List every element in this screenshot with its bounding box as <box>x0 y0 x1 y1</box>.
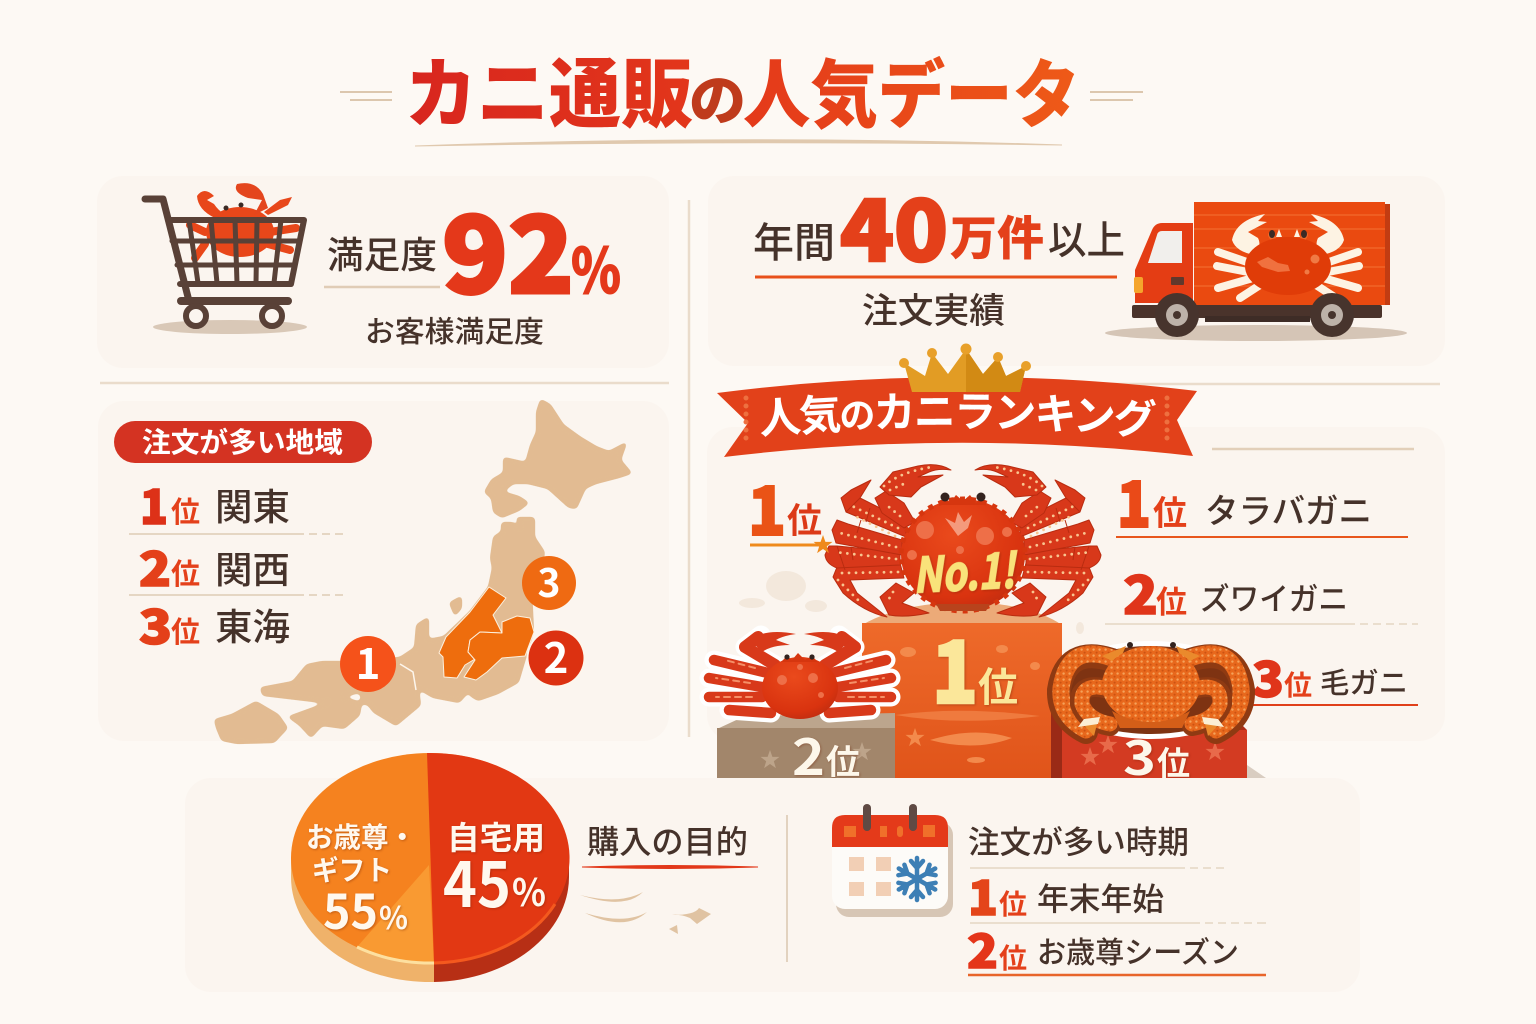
pie label 55% <box>306 816 416 943</box>
pie label 55%: ギフト <box>312 849 392 889</box>
region ranking list: 位 <box>171 551 200 593</box>
text: 400,000+ orders: 万件 <box>950 200 1044 269</box>
marker 2 <box>526 625 586 688</box>
panel: bottom band <box>185 753 1360 992</box>
Sado island <box>450 597 461 615</box>
region ranking list: 関東 <box>215 477 290 531</box>
region ranking list: 位 <box>171 489 200 531</box>
title: 人気データ <box>743 36 1080 143</box>
heading: purchase purpose: 購入の目的 <box>587 817 748 863</box>
text: 400,000+ orders <box>753 165 1125 334</box>
map of Japan <box>215 400 631 743</box>
text: peak order periods: 年末年始 <box>1037 874 1164 920</box>
marker 2: 2 <box>544 625 568 686</box>
pie label 45% <box>443 813 546 925</box>
pie label 55%: % <box>379 893 408 938</box>
illustration: snow crab 2nd <box>709 632 891 719</box>
right ranking list: 毛ガニ <box>1320 660 1408 702</box>
text: peak order periods: 位 <box>999 883 1027 923</box>
text: satisfaction 92%: % <box>571 221 621 311</box>
decorative blobs <box>739 571 1084 634</box>
title: の <box>689 56 746 136</box>
marker 3: 3 <box>537 553 561 609</box>
text: peak order periods <box>967 817 1266 982</box>
pill heading: 注文が多い地域 <box>142 421 343 461</box>
podium 1st place: 位 <box>978 655 1018 713</box>
right ranking list <box>1105 449 1418 711</box>
podium <box>717 602 1266 790</box>
Awaji island <box>361 696 373 704</box>
icon: crown <box>899 344 1031 392</box>
right ranking list: 位 <box>1284 664 1312 704</box>
pie chart: purchase purpose <box>291 753 570 982</box>
text: satisfaction 92%: 92 <box>442 172 574 323</box>
text: peak order periods: 1 <box>968 860 998 929</box>
panel: regions with most orders <box>98 400 669 743</box>
crab on truck <box>1217 214 1359 298</box>
marker 3 <box>522 553 576 610</box>
text: satisfaction 92%: お客様満足度 <box>365 309 544 351</box>
region ranking list: 2 <box>139 531 171 600</box>
Honshu <box>261 518 544 725</box>
text: satisfaction 92%: 満足度 <box>327 225 437 279</box>
podium 2nd place <box>717 713 895 790</box>
Shikoku <box>289 697 361 737</box>
icon: shopping cart with crab <box>145 183 307 334</box>
label: 1st with arrow: 1 <box>748 459 786 555</box>
text: peak order periods: 位 <box>999 937 1027 977</box>
podium 3rd place: 3 <box>1123 720 1156 789</box>
decorative motion marks <box>580 892 711 934</box>
podium 3rd place: 位 <box>1157 737 1190 785</box>
region ranking list <box>129 469 345 658</box>
label: 1st with arrow: 位 <box>787 493 822 544</box>
title: カニ通販 <box>405 33 693 143</box>
divider lines <box>100 200 1440 737</box>
region ranking list: 3 <box>139 589 172 658</box>
right ranking list: 1 <box>1117 455 1151 545</box>
panel: customer satisfaction <box>97 172 669 368</box>
text: 400,000+ orders: 40 <box>840 165 948 285</box>
text: satisfaction 92% <box>324 172 621 351</box>
illustration: king crab No.1 <box>825 465 1101 617</box>
Hokkaido <box>485 400 631 517</box>
panel: annual orders <box>708 165 1445 366</box>
marker 1 <box>340 631 396 692</box>
text: peak order periods: お歳尊シーズン <box>1037 928 1239 972</box>
podium 1st place: 1 <box>932 607 978 728</box>
text: peak order periods: 2 <box>967 916 998 982</box>
label: 1st with arrow <box>748 459 832 555</box>
podium 2nd place: 2 <box>792 718 825 790</box>
podium 3rd place <box>1051 713 1266 789</box>
icon: winter calendar <box>832 804 953 917</box>
right ranking list: タラバガニ <box>1205 484 1372 533</box>
pie label 45%: 45 <box>443 835 511 925</box>
text: peak order periods: 注文が多い時期 <box>968 817 1189 863</box>
right ranking list: 位 <box>1153 486 1187 535</box>
podium 1st place <box>862 602 1062 778</box>
Kyushu <box>215 702 287 743</box>
marker 1: 1 <box>356 631 380 692</box>
pie label 55%: 55 <box>323 873 378 943</box>
text: 400,000+ orders: 注文実績 <box>862 283 1005 334</box>
right ranking list: ズワイガニ <box>1200 574 1348 619</box>
illustration: hairy crab 3rd <box>1051 641 1251 739</box>
pie label 45%: 自宅用 <box>447 813 545 859</box>
text: 400,000+ orders: 年間 <box>753 209 835 269</box>
region ranking list: 関西 <box>215 540 290 594</box>
panel: popular crab ranking <box>700 344 1418 790</box>
pie label 45%: % <box>512 862 546 917</box>
heading: purchase purpose <box>580 817 758 934</box>
icon: delivery truck with crab <box>1105 202 1407 341</box>
pie label 55%: お歳尊・ <box>306 816 416 856</box>
ribbon banner: 人気のカニランキング <box>760 393 1156 437</box>
snowflake <box>896 858 938 900</box>
text: 400,000+ orders: 以上 <box>1048 210 1125 266</box>
highlighted region: Chubu <box>439 587 506 678</box>
region ranking list: 位 <box>171 609 200 651</box>
region ranking list: 1 <box>140 469 168 538</box>
right ranking list: 3 <box>1252 641 1284 711</box>
right ranking list: 2 <box>1123 554 1158 629</box>
region ranking list: 東海 <box>215 597 290 651</box>
right ranking list: 位 <box>1156 577 1187 622</box>
No.1 label: No.1! <box>911 531 1020 607</box>
title <box>340 33 1143 146</box>
highlighted region: Kanto <box>464 616 534 680</box>
podium 2nd place: 位 <box>826 735 860 784</box>
